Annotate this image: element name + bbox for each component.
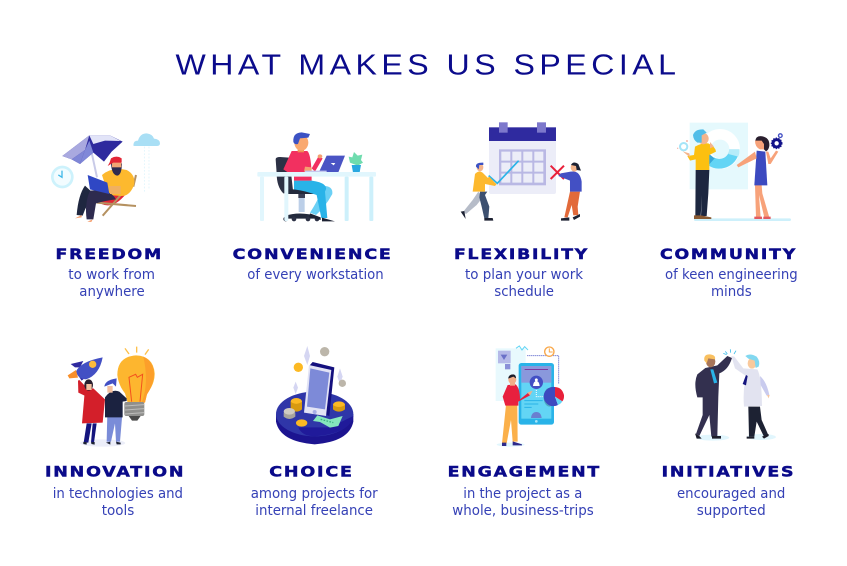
heading: ENGAGEMENT bbox=[448, 465, 601, 481]
description bbox=[452, 486, 594, 519]
heading: INITIATIVES bbox=[662, 465, 795, 481]
title: WHAT MAKES US SPECIAL bbox=[176, 50, 680, 82]
description: of keen engineering bbox=[665, 267, 798, 283]
heading: CHOICE bbox=[269, 465, 354, 481]
description bbox=[665, 267, 798, 300]
illustration: man with laptop under umbrella bbox=[51, 133, 160, 222]
description: anywhere bbox=[79, 284, 145, 300]
description: of every workstation bbox=[247, 267, 384, 283]
description: supported bbox=[697, 503, 766, 519]
description bbox=[53, 486, 183, 519]
description: tools bbox=[102, 503, 134, 519]
illustration: man at desk with laptop bbox=[257, 132, 376, 221]
illustration: two people with calendar bbox=[461, 122, 582, 221]
heading: FREEDOM bbox=[56, 247, 163, 263]
description bbox=[251, 486, 378, 519]
description: encouraged and bbox=[677, 486, 785, 502]
heading: INNOVATION bbox=[45, 465, 185, 481]
description bbox=[68, 267, 155, 300]
panel: initiatives bbox=[662, 349, 795, 519]
panel: community bbox=[660, 123, 798, 300]
panel: freedom bbox=[51, 133, 163, 300]
description bbox=[465, 267, 584, 300]
description: minds bbox=[711, 284, 752, 300]
description: among projects for bbox=[251, 486, 378, 502]
heading: CONVENIENCE bbox=[233, 247, 393, 263]
panel: engagement bbox=[448, 346, 601, 519]
illustration: people with rocket and light bulb bbox=[68, 347, 155, 447]
panel: innovation bbox=[45, 347, 185, 519]
illustration: phone on a coin with money bbox=[276, 346, 353, 444]
illustration: man and woman with chart bbox=[677, 123, 791, 221]
heading: FLEXIBILITY bbox=[454, 247, 589, 263]
panel: convenience bbox=[233, 132, 393, 283]
description: schedule bbox=[494, 284, 554, 300]
heading: COMMUNITY bbox=[660, 247, 797, 263]
description: in technologies and bbox=[53, 486, 183, 502]
description: whole, business-trips bbox=[452, 503, 594, 519]
illustration: two people high-fiving bbox=[695, 349, 776, 441]
description: to plan your work bbox=[465, 267, 584, 283]
panel: flexibility bbox=[454, 122, 589, 300]
illustration: man presenting phone dashboard bbox=[496, 346, 564, 447]
description bbox=[677, 486, 785, 519]
panel: choice bbox=[251, 346, 378, 519]
description: in the project as a bbox=[463, 486, 582, 502]
description: to work from bbox=[68, 267, 155, 283]
description: internal freelance bbox=[255, 503, 373, 519]
